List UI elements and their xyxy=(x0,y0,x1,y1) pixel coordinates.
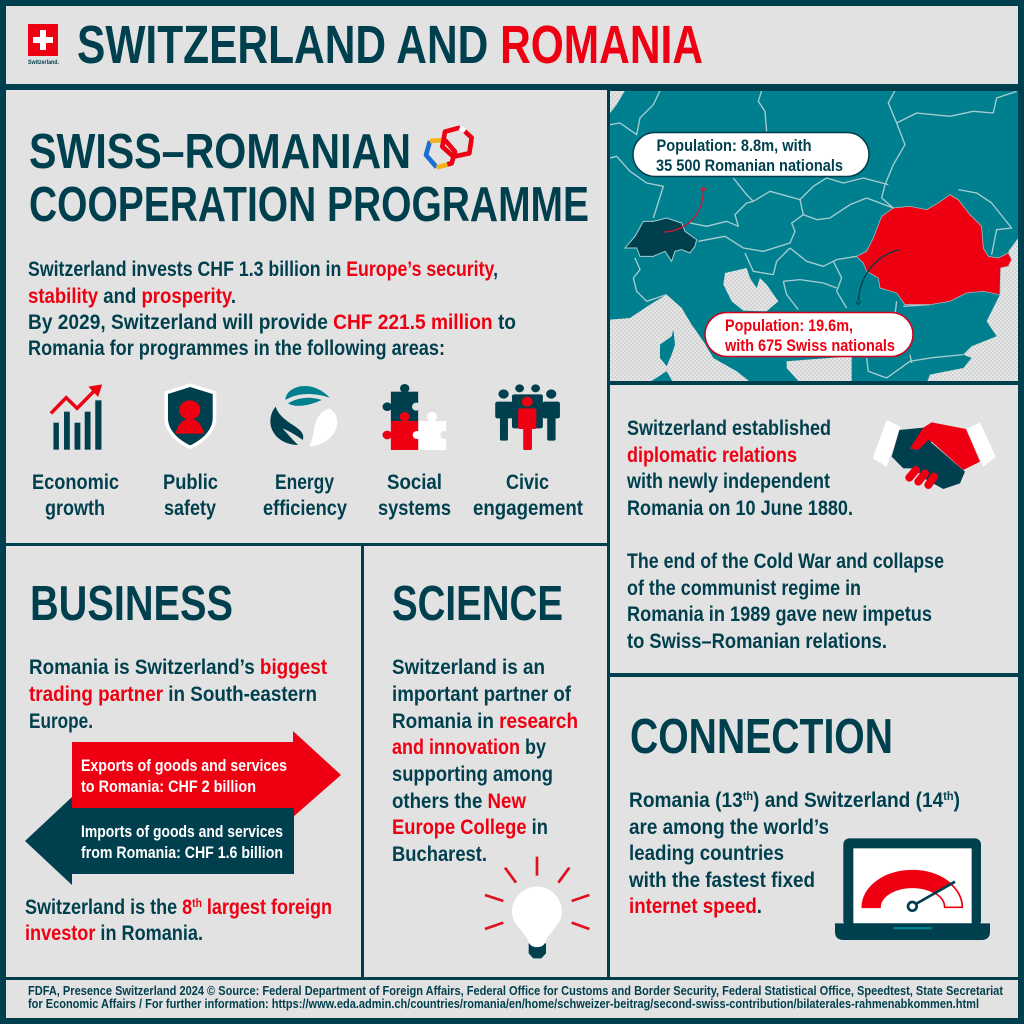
text: icon labels: Social xyxy=(387,471,442,494)
text: science partnership: supporting among xyxy=(392,763,553,786)
icon: civic engagement people xyxy=(495,384,560,450)
text: science partnership: Switzerland is an xyxy=(392,656,545,679)
callout: Swiss population xyxy=(633,132,869,176)
text: science partnership xyxy=(392,656,578,866)
text: internet speed: leading countries xyxy=(629,842,784,865)
text: science partnership: others the New xyxy=(392,790,527,813)
text: internet speed xyxy=(628,789,960,918)
text: trading partner: Romania is Switzerland’s biggest xyxy=(29,656,327,679)
text: trading partner: Europe. xyxy=(29,710,93,733)
panel: cooperation programme xyxy=(6,90,607,543)
arrow: exports xyxy=(72,731,341,817)
arrow: exports: Exports of goods and services xyxy=(81,756,287,775)
text: icon labels: engagement xyxy=(473,497,583,520)
icon: handshake xyxy=(873,420,996,489)
text: Cold War: to Swiss–Romanian relations. xyxy=(627,630,887,653)
panel: map xyxy=(610,91,1020,383)
icon: Swiss flag logo xyxy=(28,24,59,66)
callout: Romanian population: with 675 Swiss nationals xyxy=(724,336,895,355)
heading: connection: CONNECTION xyxy=(630,710,893,764)
text: investment summary xyxy=(28,258,516,360)
icon: laptop speedometer xyxy=(835,838,990,940)
heading: business: BUSINESS xyxy=(30,577,233,631)
text: internet speed: are among the world’s xyxy=(629,816,829,839)
callout: Swiss population: Population: 8.8m, with xyxy=(656,136,812,155)
text: internet speed: th xyxy=(743,789,753,803)
map: Switzerland xyxy=(625,218,697,261)
text: Cold War: The end of the Cold War and collapse xyxy=(627,550,944,573)
text: icon labels: efficiency xyxy=(263,497,347,520)
text: internet speed: with the fastest fixed xyxy=(628,869,815,892)
text: investment summary: stability and prosperity. xyxy=(28,285,236,308)
title: SWITZERLAND AND ROMANIA xyxy=(77,15,703,75)
arrow: exports: to Romania: CHF 2 billion xyxy=(81,777,256,796)
arrow: Switzerland to bubble xyxy=(663,186,707,232)
icon: Swiss flag logo: Switzerland. xyxy=(28,60,59,66)
map: country borders xyxy=(610,91,1017,378)
text: foreign investor: th xyxy=(192,896,202,910)
text: science partnership: important partner of xyxy=(392,683,572,706)
text: foreign investor xyxy=(25,896,332,945)
text: icon labels xyxy=(32,471,583,520)
text: diplomatic relations: with newly independent xyxy=(626,470,830,493)
icon: light bulb xyxy=(485,857,589,958)
icon: economic growth xyxy=(51,384,102,450)
text: science partnership: Romania in research xyxy=(392,710,578,733)
text: investment summary: Switzerland invests CHF 1.3 billion in Europe’s security, xyxy=(28,258,498,281)
text: science partnership: and innovation by xyxy=(392,736,546,759)
panel: diplomatic relations xyxy=(610,385,1018,673)
text: internet speed: ) xyxy=(954,789,960,812)
text: trading partner xyxy=(29,656,327,733)
callout: Romanian population xyxy=(705,312,913,356)
arrow: imports: Imports of goods and services xyxy=(81,822,283,841)
icon: public safety shield xyxy=(164,383,216,449)
text: diplomatic relations: Romania on 10 June 1880. xyxy=(627,497,853,520)
panel: title bar xyxy=(6,6,1018,84)
panel: footer source xyxy=(6,980,1018,1018)
icon: linked hexagons logo xyxy=(426,128,472,167)
text: diplomatic relations: Switzerland established xyxy=(627,417,831,440)
panel: business xyxy=(6,546,361,977)
text: icon labels: Civic xyxy=(506,471,549,494)
text: science partnership: Bucharest. xyxy=(392,843,487,866)
callout: Swiss population: 35 500 Romanian nationals xyxy=(656,156,843,175)
arrow: imports xyxy=(25,797,294,885)
arrow: imports: from Romania: CHF 1.6 billion xyxy=(81,843,283,862)
text: icon labels: growth xyxy=(45,497,105,520)
icon: energy leaves xyxy=(270,386,337,447)
text: diplomatic relations: diplomatic relations xyxy=(627,444,797,467)
text: internet speed: ) and Switzerland (14 xyxy=(753,789,944,812)
text: Cold War: of the communist regime in xyxy=(627,577,861,600)
arrow: Romania to bubble xyxy=(856,250,900,305)
text: Cold War xyxy=(627,550,944,653)
map: sea areas xyxy=(610,91,1020,383)
text: icon labels: Energy xyxy=(275,471,334,494)
text: diplomatic relations xyxy=(626,417,853,520)
text: icon labels: Economic xyxy=(32,471,119,494)
text: Cold War: Romania in 1989 gave new impetus xyxy=(627,603,932,626)
text: investment summary: By 2029, Switzerland will provide CHF 221.5 million to xyxy=(28,311,516,334)
text: science partnership: Europe College in xyxy=(392,816,548,839)
text: icon labels: systems xyxy=(378,497,451,520)
text: internet speed: Romania (13 xyxy=(629,789,754,812)
heading: programme: SWISS–ROMANIAN xyxy=(29,125,411,179)
text: foreign investor: Switzerland is the 8 xyxy=(25,896,202,919)
text: foreign investor: largest foreign xyxy=(202,896,332,919)
text: icon labels: safety xyxy=(164,497,216,520)
panel: science xyxy=(364,546,607,977)
text: icon labels: Public xyxy=(163,471,218,494)
text: investment summary: Romania for programmes in the following areas: xyxy=(28,337,445,360)
panel: connection xyxy=(610,677,1018,977)
heading: science: SCIENCE xyxy=(392,577,563,631)
heading: programme: COOPERATION PROGRAMME xyxy=(29,178,589,232)
text: trading partner: trading partner in South-eastern xyxy=(29,683,317,706)
text: internet speed: internet speed. xyxy=(629,895,762,918)
heading: programme xyxy=(29,125,589,232)
map: Romania xyxy=(857,195,1012,305)
callout: Romanian population: Population: 19.6m, xyxy=(725,316,853,335)
text: foreign investor: investor in Romania. xyxy=(25,922,203,945)
icon: social systems puzzle xyxy=(383,384,449,450)
text: internet speed: th xyxy=(943,789,954,803)
